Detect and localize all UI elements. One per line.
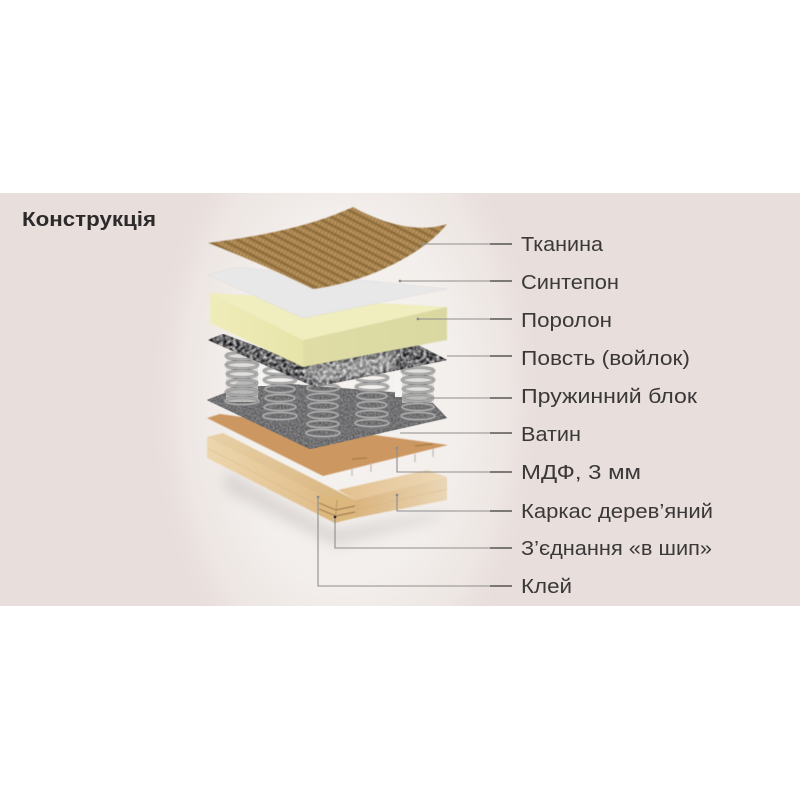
layer: felt	[208, 334, 447, 387]
label: spring block: Пружинний блок	[521, 386, 697, 408]
frame shadow	[225, 470, 440, 545]
layer: spring block	[225, 352, 435, 437]
leader line ends	[490, 244, 512, 586]
label: foam: Поролон	[521, 310, 612, 332]
label: batting: Ватин	[521, 424, 581, 446]
label: fabric: Тканина	[521, 234, 604, 256]
labels	[521, 234, 713, 598]
background panel	[0, 193, 800, 606]
leader dots	[317, 280, 419, 518]
layer: synthetic padding	[208, 267, 447, 318]
label: tenon joint: З’єднання «в шип»	[521, 538, 712, 560]
label: MDF: МДФ, 3 мм	[521, 462, 641, 484]
layer: MDF board	[207, 414, 448, 476]
label: glue: Клей	[521, 576, 572, 598]
layer: batting	[207, 380, 447, 449]
staples	[352, 449, 433, 476]
leader lines	[318, 244, 490, 586]
label: felt: Повсть (войлок)	[521, 348, 690, 370]
right bar	[338, 470, 447, 518]
left bar	[207, 433, 355, 523]
layer: foam	[210, 293, 447, 367]
tenon joint	[319, 495, 355, 523]
white backing	[258, 362, 402, 397]
label: wooden frame: Каркас дерев’яний	[521, 501, 713, 523]
label: padding: Синтепон	[521, 272, 619, 294]
heading: Конструкція	[22, 208, 156, 231]
layer: fabric	[208, 207, 447, 289]
layer: wooden frame	[207, 433, 447, 523]
